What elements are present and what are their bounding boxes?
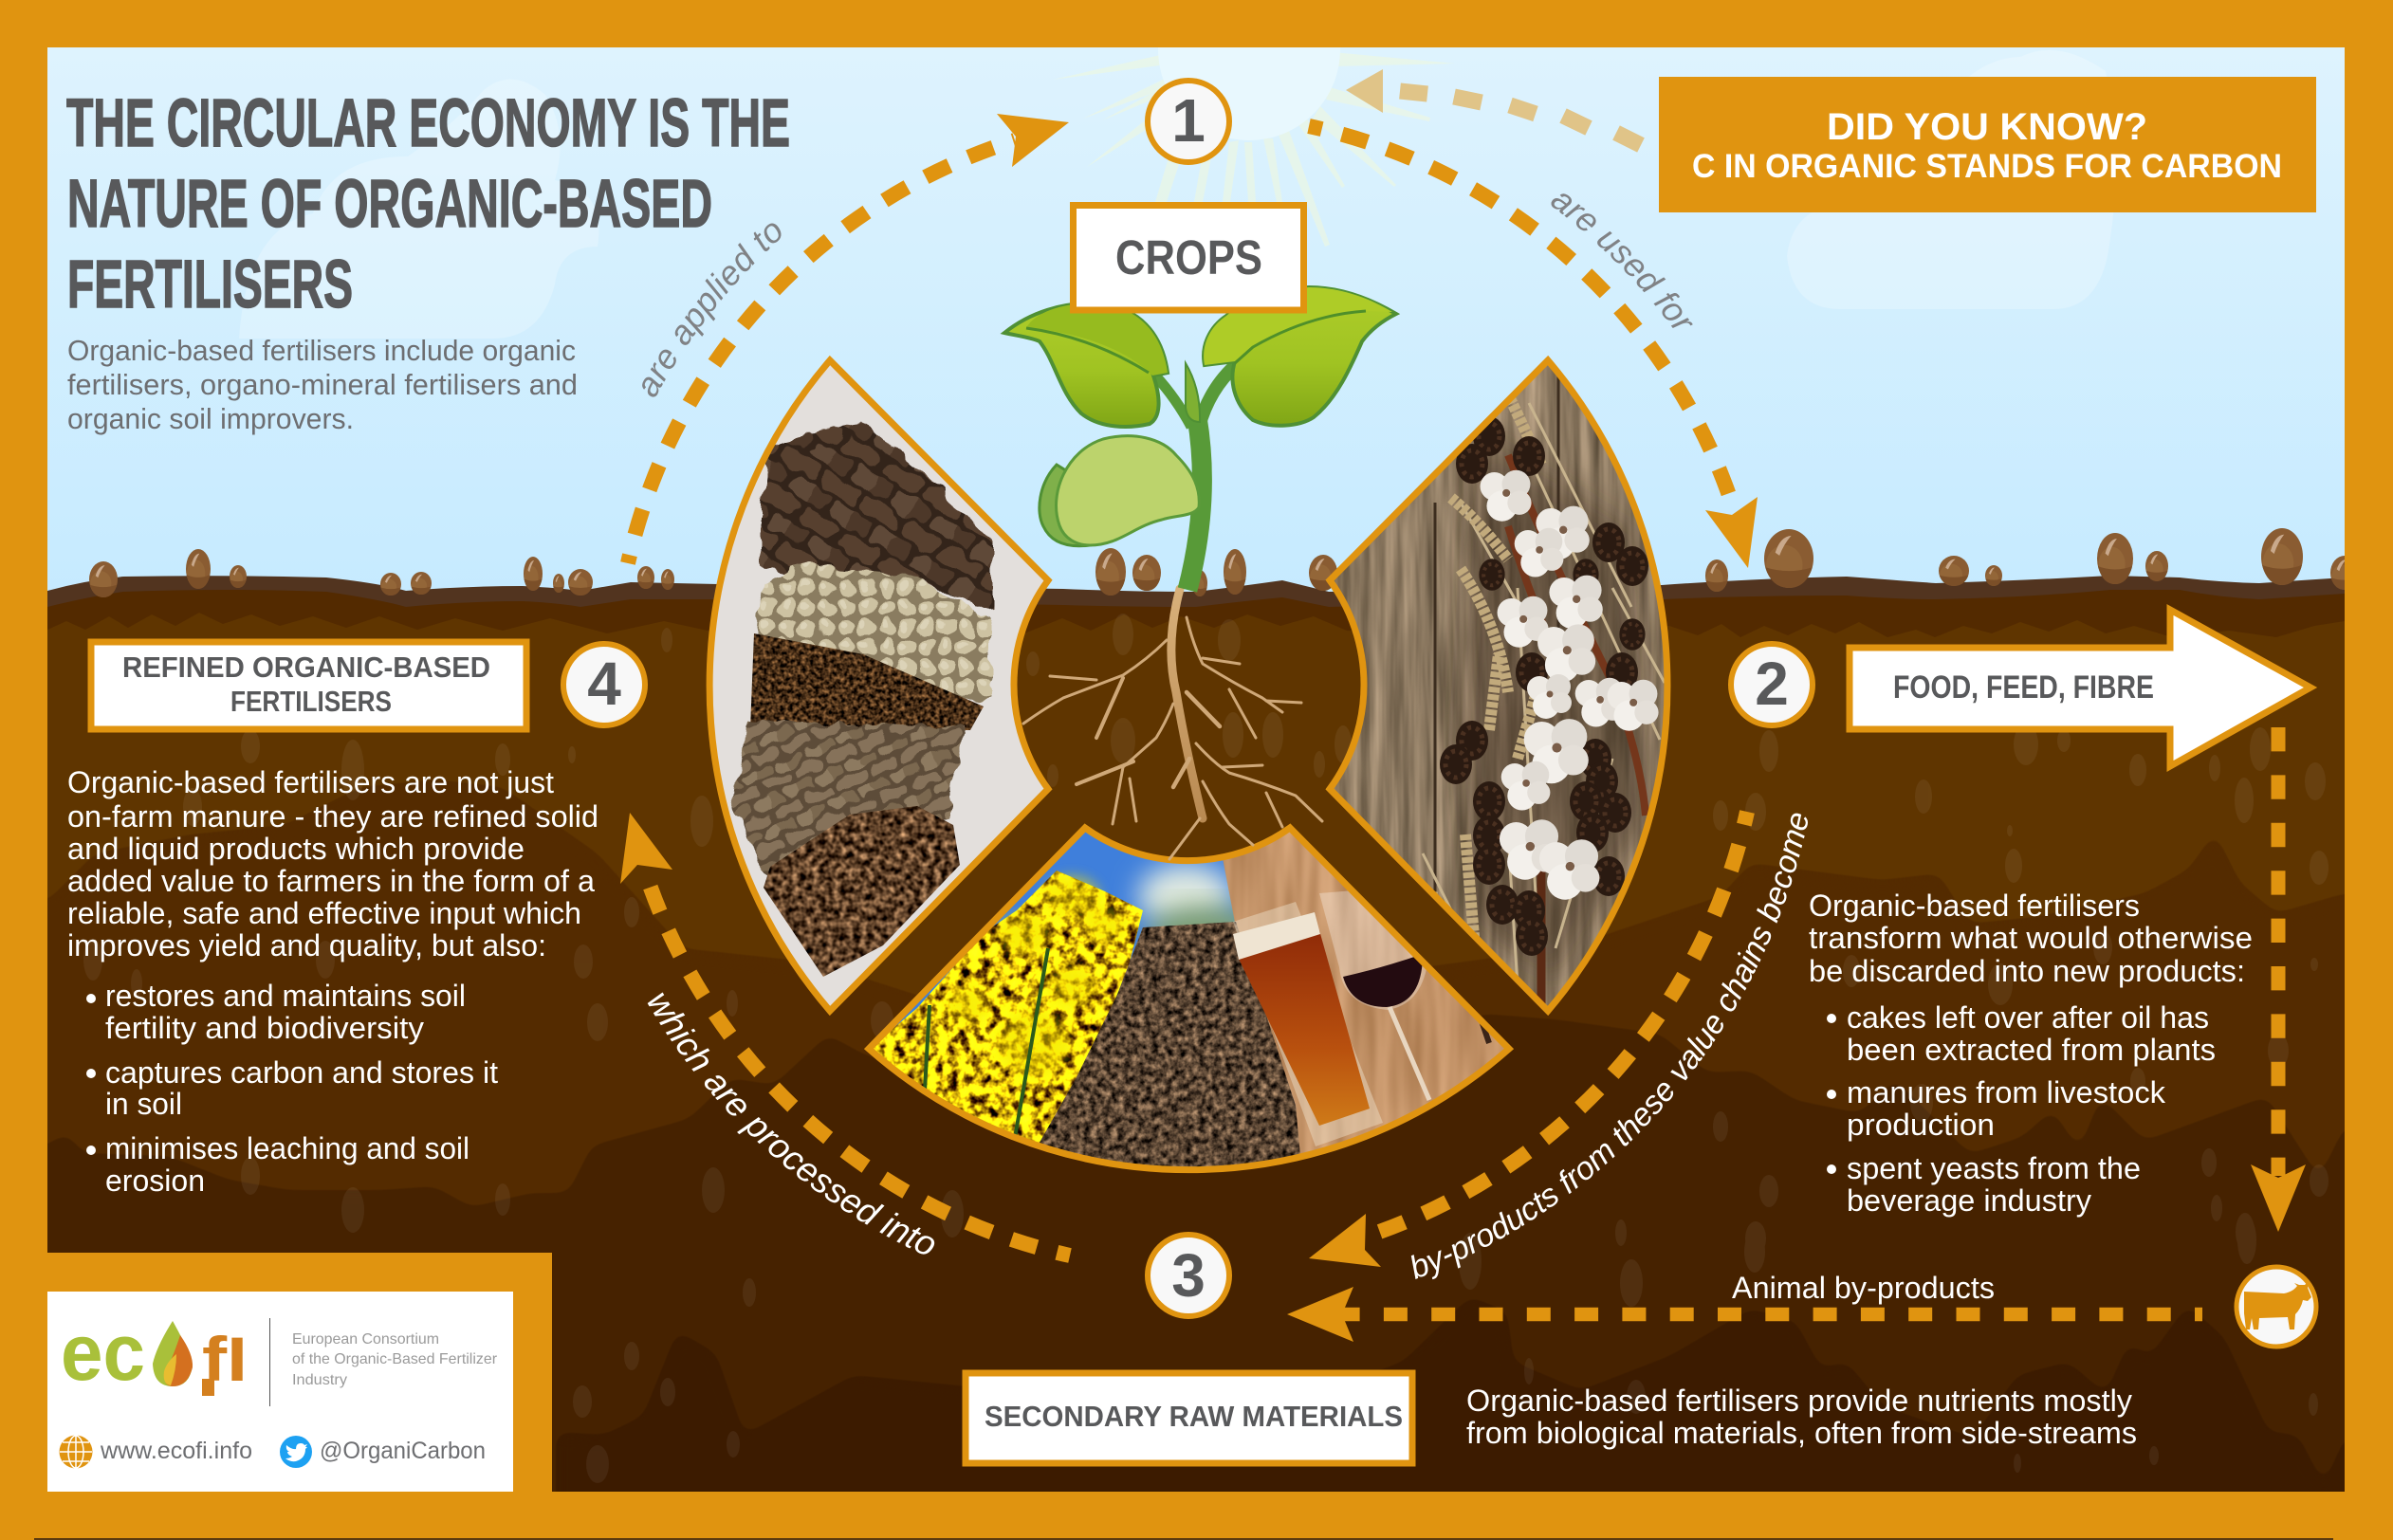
text block: refined fertilisers description: on-farm manure - they are refined solid — [67, 799, 598, 834]
seed leaf — [1040, 436, 1199, 546]
callout: did you know: DID YOU KNOW? — [1827, 106, 2147, 148]
text block: refined fertilisers description: restores and maintains soil — [105, 979, 466, 1013]
label box: crops: CROPS — [1115, 230, 1262, 284]
text block: refined fertilisers description: and liquid products which provide — [67, 832, 525, 866]
text block: refined fertilisers description: Organic-based fertilisers are not just — [67, 765, 554, 799]
plant roots — [1023, 589, 1322, 859]
text block: refined fertilisers description: captures carbon and stores it — [105, 1055, 498, 1090]
text block: secondary raw materials: Organic-based fertilisers provide nutrients mostly — [1466, 1384, 2132, 1418]
logo: ecofi — [61, 1308, 248, 1397]
ground layers — [9, 576, 2385, 1531]
subtitle text — [67, 334, 578, 435]
arrow label: are used for: are used for — [1552, 193, 1693, 328]
icon: cow — [2237, 1267, 2316, 1347]
right leaf — [1204, 287, 1396, 426]
panel: refined fertiliser photo (left petal) — [702, 356, 1053, 1019]
step 1 badge: 1 — [1171, 86, 1206, 155]
pine cones — [1440, 416, 1648, 956]
wheat stems — [1423, 403, 1665, 986]
step 4 badge: 4 — [587, 650, 621, 718]
text block: secondary raw materials: from biological materials, often from side-streams — [1466, 1416, 2137, 1450]
label box: refined organic-based fertilisers: REFINED ORGANIC-BASED — [122, 651, 490, 684]
subtitle text: organic soil improvers. — [67, 402, 354, 435]
arrow 4: processed into refined fertilisers — [620, 813, 1070, 1256]
clouds — [239, 118, 2113, 339]
text block: by-product transformation: beverage industry — [1847, 1183, 2091, 1218]
beige granules — [754, 563, 990, 702]
plant with leaves — [1004, 287, 1396, 590]
panel: ecofi logo and contacts — [47, 1253, 552, 1492]
label: animal by-products: Animal by-products — [1732, 1271, 1995, 1305]
label box: crops — [1074, 205, 1303, 310]
text block: by-product transformation: production — [1847, 1108, 1995, 1142]
text block: refined fertilisers description: minimises leaching and soil — [105, 1131, 469, 1165]
label box: refined organic-based fertilisers: FERTILISERS — [230, 685, 392, 718]
wood background — [1224, 833, 1504, 1153]
logo: ecofi: fI — [202, 1324, 248, 1394]
arrow 3: by-products become secondary raw materials — [1309, 812, 1747, 1267]
text block: by-product transformation: been extracted from plants — [1847, 1033, 2216, 1067]
text block: by-product transformation: manures from livestock — [1847, 1075, 2166, 1109]
text block: secondary raw materials — [1466, 1384, 2137, 1450]
text block: refined fertilisers description: erosion — [105, 1164, 205, 1198]
text block: by-product transformation — [1809, 889, 2253, 1218]
arrow 1: fertilisers are applied to crops — [628, 114, 1069, 563]
text block: refined fertilisers description: fertility and biodiversity — [105, 1011, 424, 1045]
callout: did you know: C IN ORGANIC STANDS FOR CARBON — [1692, 148, 2282, 185]
arrow 2: crops are used for food, feed, fibre — [1309, 126, 1758, 568]
brown crumble — [764, 806, 960, 977]
wheat ears — [1431, 398, 1541, 977]
rocks on the horizon — [89, 528, 2359, 597]
left leaf — [1004, 303, 1168, 427]
title: NATURE OF ORGANIC-BASED — [67, 167, 712, 242]
logo: ecofi: ec — [61, 1308, 145, 1397]
step 2 badge: 2 — [1755, 650, 1789, 718]
step 1 badge — [1148, 81, 1229, 162]
light pellets — [734, 721, 964, 886]
rapeseed flowers — [854, 871, 1143, 1147]
title — [66, 86, 790, 322]
label box: secondary raw materials: SECONDARY RAW MATERIALS — [985, 1400, 1403, 1433]
wine glass — [1319, 888, 1428, 1010]
arrow label: by-products from these value chains become: by-products from these value chains become — [1411, 814, 1808, 1280]
text block: by-product transformation: transform what would otherwise — [1809, 921, 2253, 955]
arrow: food feed fibre down to animal by-products — [2251, 727, 2306, 1232]
panel: rapeseed, soil and beverages photo (bottom petal) — [854, 816, 1527, 1185]
callout: did you know — [1659, 77, 2316, 212]
text block: by-product transformation: cakes left over after oil has — [1847, 1000, 2209, 1035]
dark crumble — [750, 633, 984, 730]
step 2 badge — [1731, 644, 1813, 725]
text block: by-product transformation: spent yeasts from the — [1847, 1151, 2141, 1185]
text block: by-product transformation: be discarded into new products: — [1809, 954, 2245, 988]
consortium name — [292, 1331, 498, 1388]
step 3 badge — [1148, 1235, 1229, 1316]
sun — [1056, 47, 1453, 247]
bud — [1186, 363, 1200, 422]
consortium name: Industry — [292, 1372, 347, 1388]
subtitle text: Organic-based fertilisers include organic — [67, 334, 576, 367]
soil — [1040, 922, 1300, 1166]
subtitle text: fertilisers, organo-mineral fertilisers and — [67, 368, 578, 401]
red branches — [1508, 455, 1646, 816]
icon: twitter — [280, 1436, 312, 1468]
arrow box: food feed fibre: FOOD, FEED, FIBRE — [1893, 669, 2154, 706]
label box: secondary raw materials — [966, 1373, 1412, 1463]
panel: cotton, cones and wheat photo (right petal) — [1323, 356, 1674, 1019]
consortium name: of the Organic-Based Fertilizer — [292, 1351, 498, 1367]
text block: refined fertilisers description: improves yield and quality, but also: — [67, 928, 546, 962]
twitter handle: @OrganiCarbon — [320, 1438, 486, 1464]
arrow label: which are processed into: which are processed into — [647, 992, 935, 1255]
step 3 badge: 3 — [1171, 1241, 1206, 1310]
cotton bolls — [1481, 470, 1659, 900]
arrow box: food feed fibre — [1850, 610, 2310, 766]
text block: refined fertilisers description: reliable, safe and effective input which — [67, 896, 581, 930]
faded arrow: did you know to crops — [1346, 69, 1641, 145]
arrow label: are applied to: are applied to — [642, 224, 782, 397]
text block: by-product transformation: Organic-based fertilisers — [1809, 889, 2140, 923]
consortium name: European Consortium — [292, 1331, 439, 1348]
beer glass — [1233, 902, 1383, 1146]
step 4 badge — [563, 644, 645, 725]
title: FERTILISERS — [67, 248, 353, 322]
website: www.ecofi.info — [100, 1438, 252, 1464]
text block: refined fertilisers description: added value to farmers in the form of a — [67, 864, 595, 898]
arrow: animal by-products to secondary raw materials — [1287, 1287, 2202, 1342]
text block: refined fertilisers description — [67, 765, 598, 1198]
icon: globe — [59, 1436, 93, 1468]
stem — [1155, 365, 1236, 590]
dark pellets — [761, 422, 993, 612]
label box: refined organic-based fertilisers — [91, 642, 526, 729]
text block: refined fertilisers description: in soil — [105, 1087, 182, 1121]
title: THE CIRCULAR ECONOMY IS THE — [66, 86, 790, 161]
